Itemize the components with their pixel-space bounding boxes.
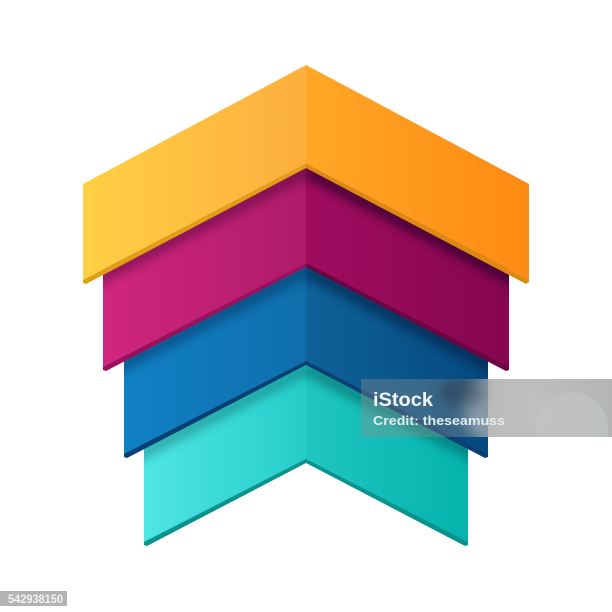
image id tag: [0, 591, 67, 606]
watermark text: iStock: iStock: [373, 390, 433, 411]
arrow: teal chevron: [144, 365, 468, 546]
watermark text: credit line: Credit: theseamuss: [373, 414, 505, 428]
watermark: iStock credit banner: [361, 379, 612, 437]
arrow: yellow-orange chevron: [83, 65, 529, 284]
arrow: blue chevron: [124, 267, 488, 458]
arrow: magenta chevron: [103, 164, 509, 371]
image id number: 542938150: [8, 594, 63, 606]
